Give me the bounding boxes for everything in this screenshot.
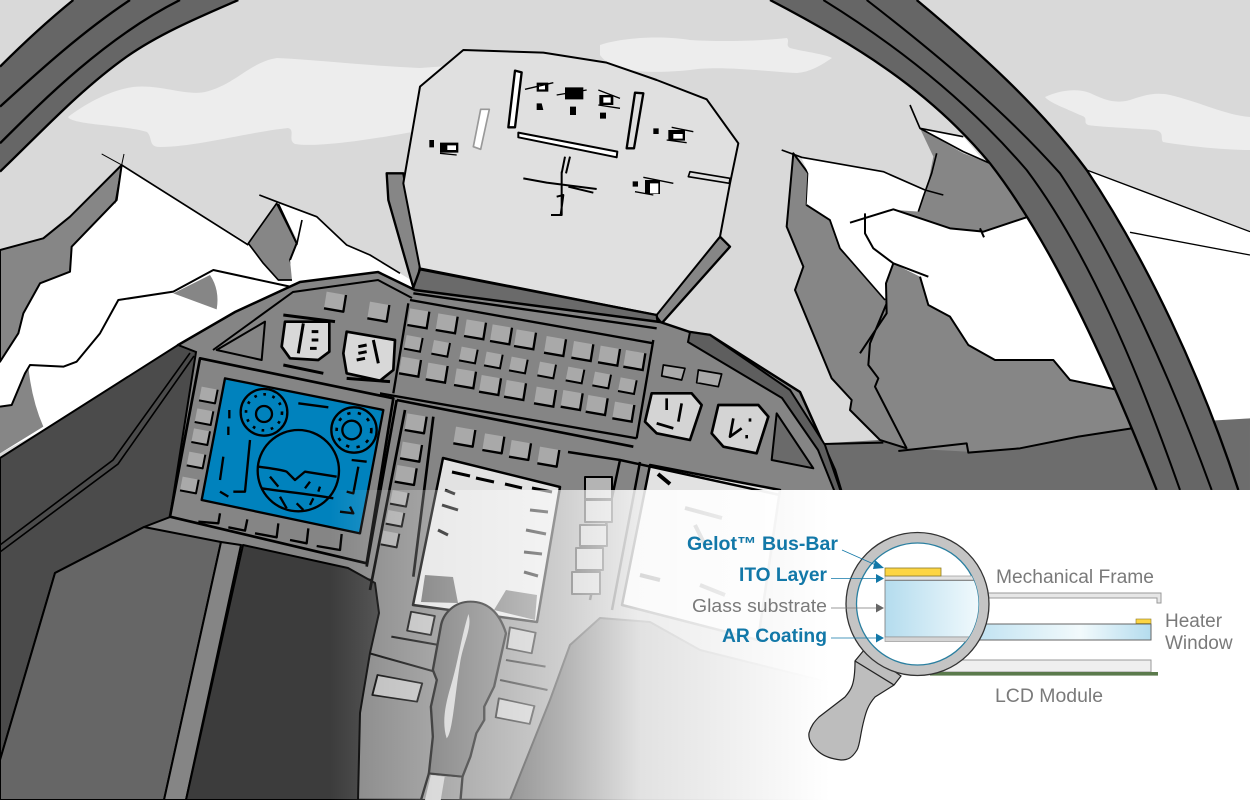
label: Heater Window: Window bbox=[1165, 633, 1233, 654]
panel: dashboard coaming inner line bbox=[213, 280, 412, 350]
callout: ITO Layer: ITO Layer bbox=[739, 565, 828, 586]
LCD module bbox=[935, 660, 1151, 672]
panel: centre display bezel bbox=[367, 400, 633, 590]
panel: left cockpit wall bbox=[0, 345, 196, 760]
wall double line bbox=[0, 353, 194, 552]
panel: right canopy arch bbox=[770, 0, 1238, 490]
panel: right display bbox=[568, 452, 780, 640]
label: Heater Window: Heater bbox=[1165, 611, 1222, 632]
callout: AR Coating: AR Coating bbox=[722, 626, 827, 647]
panel: dashboard outer coaming bbox=[688, 332, 842, 495]
callout: Glass substrate: Glass substrate bbox=[692, 595, 827, 616]
panel: upper right gauges bbox=[645, 365, 813, 468]
panel: side console seats bbox=[0, 527, 900, 800]
callout: Glass substrate bbox=[692, 595, 884, 616]
panel: right mountains and ground bbox=[782, 105, 1250, 490]
right dial bbox=[331, 407, 377, 453]
panel: centre display screen bbox=[413, 458, 560, 622]
label: LCD Module: LCD Module bbox=[995, 686, 1103, 707]
panel: upper left gauges bbox=[217, 292, 395, 382]
LCD circuit board bbox=[930, 672, 1158, 676]
panel: left mountains bbox=[0, 154, 417, 453]
label: Mechanical Frame: Mechanical Frame bbox=[996, 567, 1154, 588]
callout: Gelot Bus-Bar: Gelot™ Bus-Bar bbox=[687, 534, 839, 555]
HUD glass bbox=[403, 50, 738, 315]
callout: ITO Layer bbox=[739, 565, 884, 586]
small bus-bar bbox=[1136, 619, 1151, 624]
panel: lower console buttons bbox=[370, 612, 547, 724]
mechanical frame bbox=[985, 593, 1161, 603]
blue multifunction display bbox=[202, 378, 383, 533]
left dial bbox=[241, 389, 287, 436]
panel: heater window cross-section bbox=[930, 593, 1161, 676]
HUD base bar bbox=[410, 269, 659, 330]
panel: dashboard base bbox=[140, 272, 900, 800]
HUD symbology bbox=[429, 71, 730, 215]
white fade overlay bbox=[0, 490, 1250, 800]
panel: left display bezel bbox=[170, 358, 393, 563]
callout: AR Coating bbox=[722, 626, 884, 647]
callout: Gelot Bus-Bar bbox=[687, 534, 884, 569]
magnified layers bbox=[885, 568, 985, 642]
clouds bbox=[68, 38, 1250, 150]
panel: center keypad bbox=[380, 293, 657, 438]
icon: magnifier handle bbox=[809, 650, 901, 760]
panel: control stick bbox=[421, 602, 506, 800]
panel: left canopy arch bbox=[0, 0, 238, 172]
HUD struts bbox=[387, 173, 730, 323]
panel: head-up display bbox=[387, 50, 738, 330]
heater window glass bbox=[975, 624, 1151, 640]
icon: magnifier lens bbox=[846, 532, 989, 676]
attitude indicator bbox=[258, 430, 339, 511]
